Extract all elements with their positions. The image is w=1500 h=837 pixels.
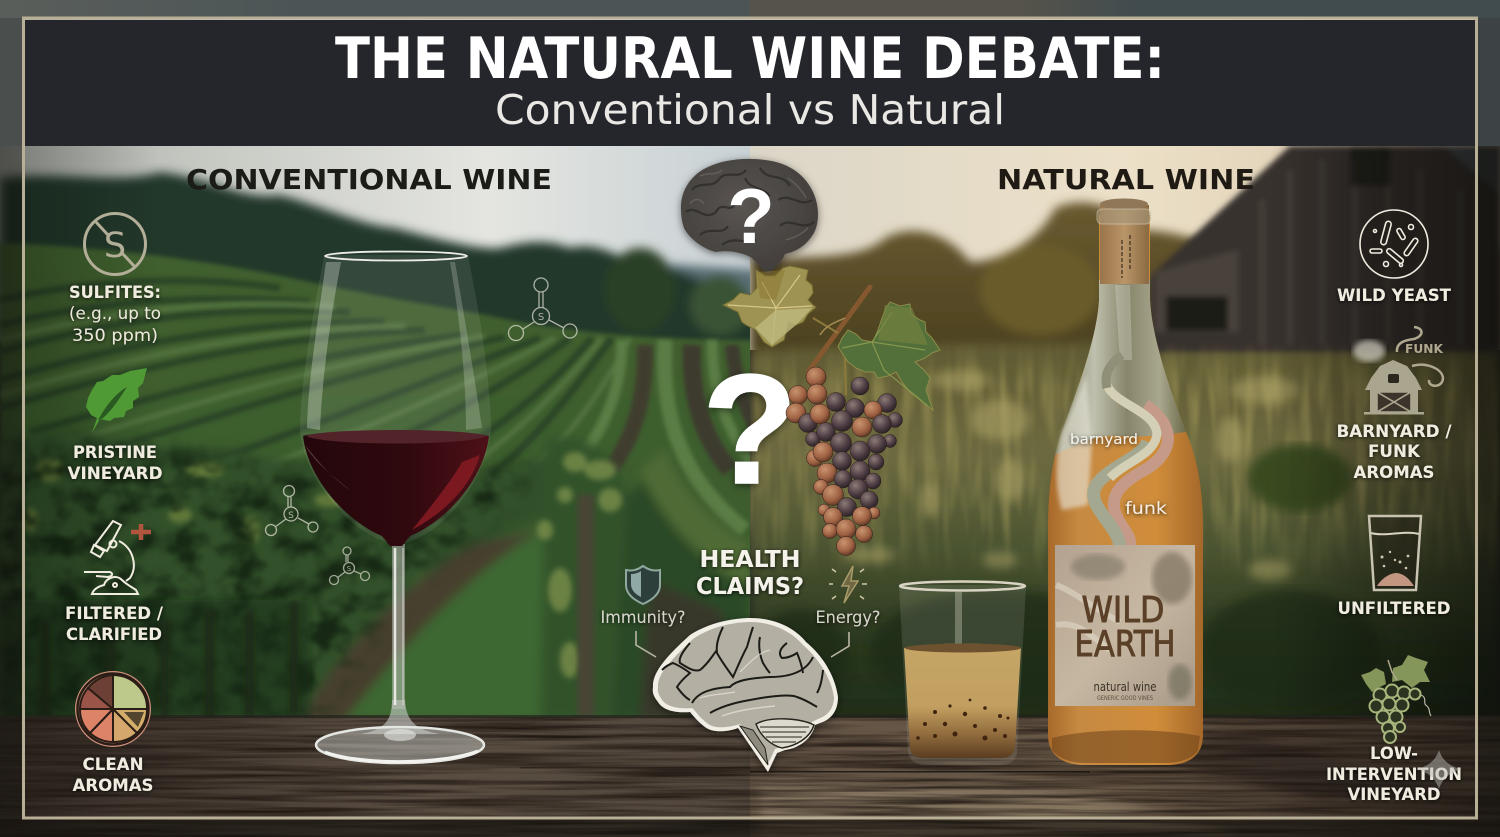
heading: conventional wine: CONVENTIONAL WINE — [186, 163, 552, 196]
glass foot — [316, 700, 484, 763]
large question mark: ? — [702, 343, 798, 517]
label: clean aromas: AROMAS — [72, 776, 154, 796]
main title: THE NATURAL WINE DEBATE: — [335, 26, 1165, 92]
bottle sediment — [1052, 730, 1200, 763]
label: low-intervention vineyard: INTERVENTION — [1326, 765, 1462, 785]
callout line: energy — [831, 632, 849, 657]
tumbler rim — [900, 582, 1025, 590]
label: immunity: Immunity? — [600, 608, 686, 627]
background: conventional vineyard scene — [0, 0, 760, 720]
label: low-intervention vineyard — [1326, 744, 1462, 805]
label: sulfites: 350 ppm) — [72, 326, 158, 346]
vine stem — [808, 287, 870, 372]
glass stem — [392, 544, 405, 709]
bottle label — [1055, 545, 1195, 706]
small unfiltered tumbler — [900, 582, 1025, 764]
title panel — [25, 20, 1475, 146]
aroma swirl — [1094, 355, 1168, 547]
label: pristine vineyard: PRISTINE — [73, 443, 157, 463]
wine glass — [301, 252, 490, 763]
cork and lip — [1097, 198, 1151, 284]
icon: no sulfites: S — [104, 226, 126, 266]
callout line: immunity — [636, 631, 656, 657]
pale leaf — [723, 266, 816, 347]
bottle label: WILD — [1082, 590, 1164, 631]
icon: grape vine — [1361, 655, 1431, 743]
label: wild yeast: WILD YEAST — [1337, 286, 1451, 306]
dark brain — [681, 159, 818, 275]
grapes — [786, 367, 902, 556]
bottle body — [1048, 215, 1203, 765]
green leaf — [838, 302, 940, 410]
glass bowl — [301, 256, 490, 542]
molecule icon: upper — [508, 278, 577, 340]
bottle label: GENERIC GOOD VINES — [1097, 695, 1153, 702]
clear glass neck — [1055, 280, 1186, 455]
label: unfiltered: UNFILTERED — [1338, 599, 1450, 619]
icon: citrus aromas — [75, 671, 151, 747]
label: sulfites: SULFITES: — [69, 283, 161, 303]
icon: barn with funk swirl — [1353, 327, 1444, 414]
label: pristine vineyard — [68, 443, 162, 484]
icon: no sulfites — [84, 214, 146, 274]
health claims heading: CLAIMS? — [696, 574, 804, 600]
label: pristine vineyard: VINEYARD — [68, 464, 162, 484]
molecule icon: left — [266, 486, 318, 536]
label: barnyard funk aromas: FUNK — [1368, 442, 1421, 462]
grape cluster with leaves — [723, 266, 940, 556]
icon: wild yeast — [1360, 210, 1428, 278]
subtitle: Conventional vs Natural — [495, 86, 1005, 134]
health claims heading — [696, 547, 804, 600]
white reflection — [1057, 375, 1092, 510]
label: filtered clarified — [65, 604, 164, 645]
label: filtered clarified: FILTERED / — [65, 604, 164, 624]
label: sulfites — [69, 283, 161, 346]
molecule icon: lower: S — [347, 565, 352, 573]
label: sulfites: (e.g., up to — [69, 304, 161, 324]
label: barnyard: barnyard — [1070, 432, 1138, 448]
molecule icon: left: S — [288, 511, 294, 521]
health claims heading: HEALTH — [700, 547, 800, 573]
glass rim and highlights — [307, 252, 482, 430]
brain illustration — [653, 618, 838, 772]
label: funk: funk — [1125, 499, 1167, 519]
panel: conventional attributes — [65, 214, 164, 796]
icon: sparkle watermark — [1416, 750, 1462, 789]
label: low-intervention vineyard: LOW- — [1370, 744, 1418, 764]
molecule icon: lower — [330, 547, 370, 584]
icon: immunity shield — [626, 566, 660, 604]
wine bottle — [1048, 198, 1203, 765]
tumbler glass — [900, 586, 1025, 764]
background: natural wine field and barn scene — [750, 0, 1500, 720]
panel: natural attributes — [1326, 210, 1462, 805]
label: energy: Energy? — [816, 608, 880, 627]
label: clean aromas: CLEAN — [82, 755, 144, 775]
background: wooden table — [0, 715, 1500, 837]
label: barnyard funk aromas — [1336, 422, 1452, 483]
icon: unfiltered glass — [1369, 516, 1421, 590]
tumbler liquid with sediment — [904, 644, 1021, 758]
icon: green leaf — [86, 368, 147, 433]
label: barnyard funk aromas: AROMAS — [1354, 463, 1434, 483]
bottle label: natural wine — [1094, 680, 1156, 694]
small question mark: ? — [727, 172, 775, 260]
icon: microscope with plus — [84, 521, 151, 594]
label: low-intervention vineyard: VINEYARD — [1348, 785, 1440, 805]
label: filtered clarified: CLARIFIED — [66, 625, 162, 645]
bottle label: EARTH — [1074, 624, 1176, 665]
central brain with question mark — [681, 159, 818, 275]
red wine — [303, 430, 489, 546]
heading: natural wine: NATURAL WINE — [997, 163, 1255, 196]
label: barnyard funk aromas: BARNYARD / — [1336, 422, 1452, 442]
icon: barn with funk swirl: FUNK — [1405, 342, 1444, 356]
label: clean aromas — [72, 755, 154, 796]
molecule icon: upper: S — [538, 312, 544, 323]
icon: energy bolt — [829, 566, 867, 603]
